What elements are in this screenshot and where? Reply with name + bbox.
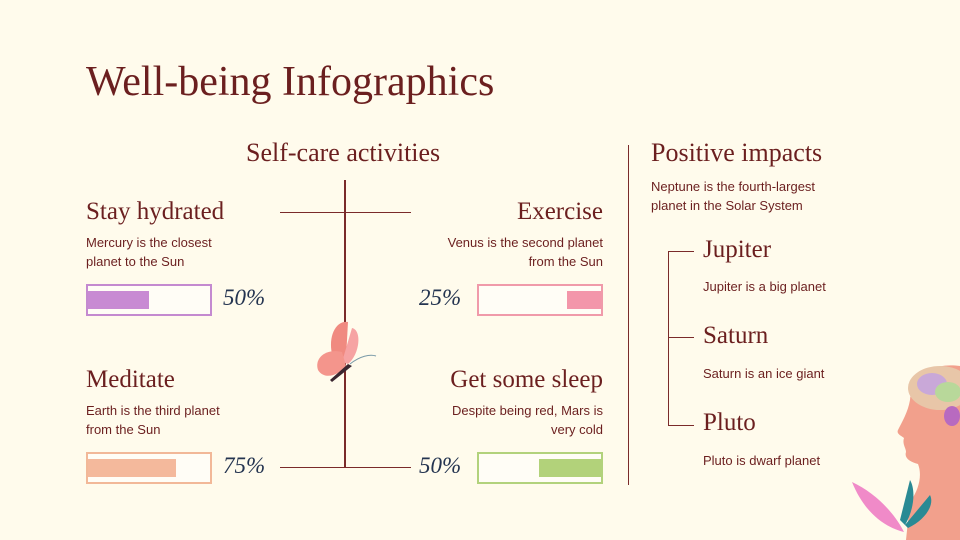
panel: meditate: 75% [223,453,265,478]
title: Well-being Infographics [86,59,494,105]
bracket lines [668,251,694,426]
item: jupiter [703,236,826,294]
heading: positive impacts: Positive impacts [651,138,822,167]
panel: sleep: 50% [419,453,461,478]
panel: meditate [86,366,265,484]
panel: exercise: Venus is the second planet from the Sun [448,235,603,269]
panel: meditate: Earth is the third planet from the Sun [86,403,220,437]
item: pluto: Pluto [703,409,756,436]
item: saturn [703,322,824,381]
panel: stay hydrated: Stay hydrated [86,198,224,225]
panel: stay hydrated: 50% [223,285,265,310]
central cross lines [280,180,411,468]
illustration: head with brain [852,365,960,540]
icon: butterfly [317,322,376,382]
panel: stay hydrated [86,198,265,316]
item: pluto [703,409,820,468]
subtitle: self-care: Self-care activities [246,138,440,167]
item: jupiter: Jupiter [703,236,771,263]
item: saturn: Saturn is an ice giant [703,366,824,381]
panel: exercise: Exercise [517,198,603,225]
text: intro: Neptune is the fourth-largest planet in the Solar System [651,179,815,213]
panel: meditate: Meditate [86,366,175,393]
divider [628,145,629,485]
panel: exercise: 25% [419,285,461,310]
item: jupiter: Jupiter is a big planet [703,279,826,294]
item: saturn: Saturn [703,322,768,349]
panel: sleep: Despite being red, Mars is very cold [452,403,603,437]
panel: stay hydrated: Mercury is the closest planet to the Sun [86,235,212,269]
panel: exercise [419,198,603,316]
panel: sleep [419,366,603,484]
item: pluto: Pluto is dwarf planet [703,453,820,468]
panel: sleep: Get some sleep [450,366,603,393]
